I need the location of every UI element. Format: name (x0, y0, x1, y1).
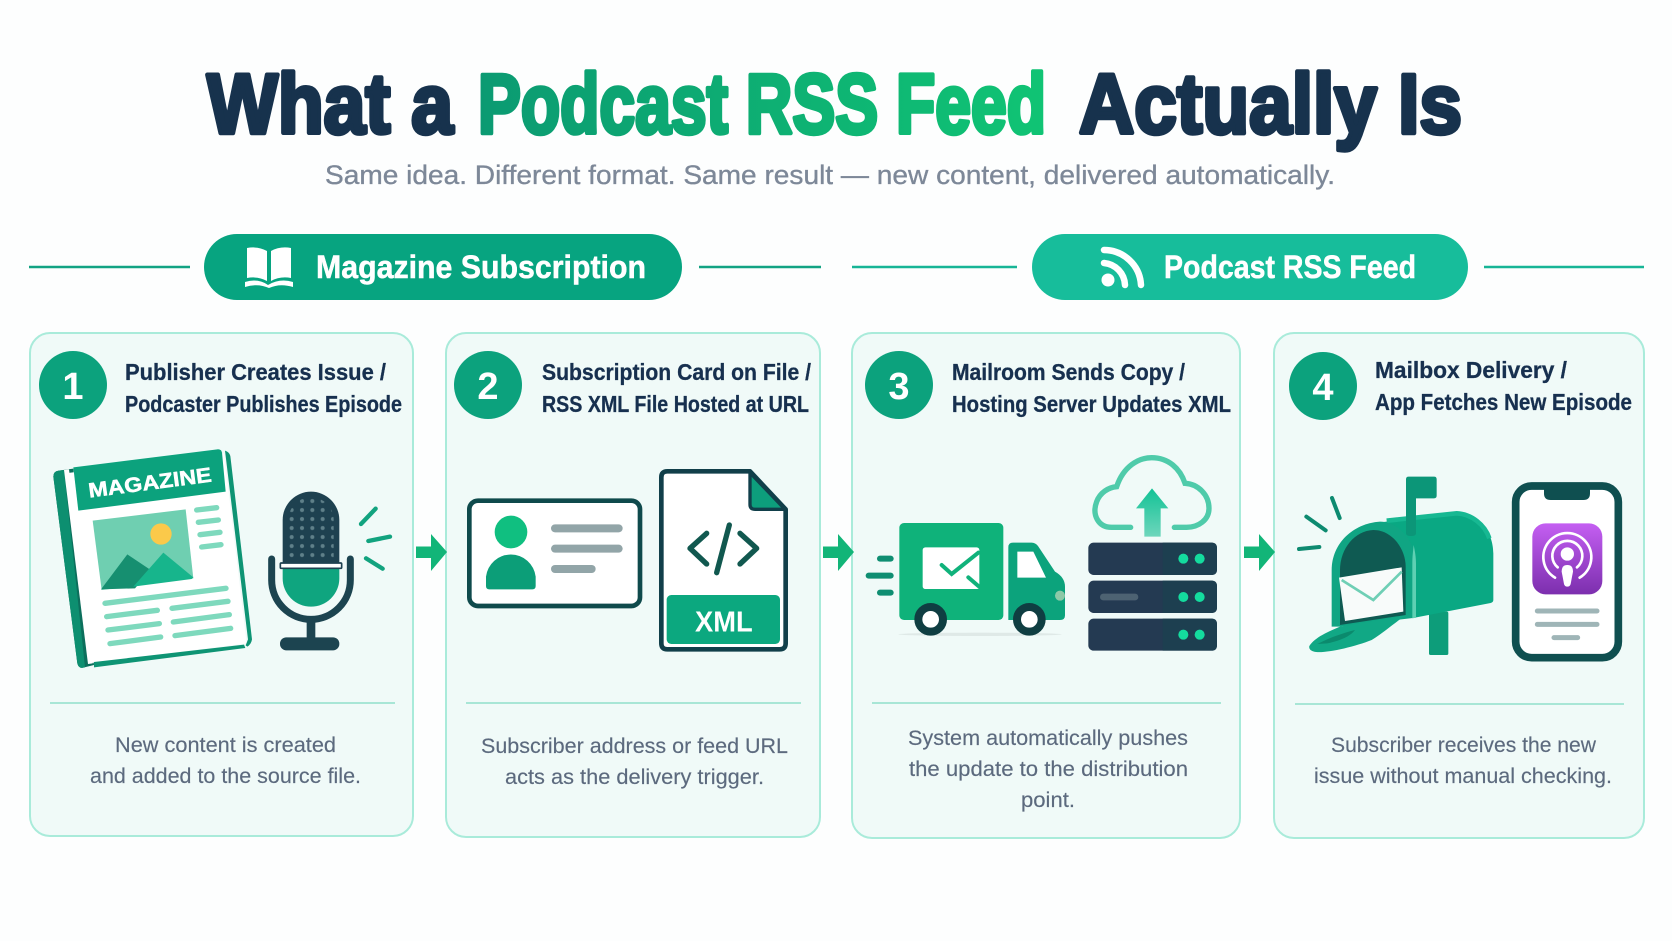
section header: Podcast RSS Feed (852, 234, 1644, 300)
icon: subscription card (469, 501, 640, 606)
icon: XML file (661, 471, 786, 649)
step 3 heading: Mailroom Sends Copy / (952, 359, 1186, 385)
title: What a (207, 57, 454, 151)
step 3 badge (865, 351, 933, 419)
step 2 badge: 2 (477, 366, 499, 408)
step 3 description: System automatically pushes (908, 726, 1188, 750)
step 1 badge (39, 351, 107, 419)
step 1 heading: Publisher Creates Issue / (125, 359, 387, 385)
panel: step 3 (852, 333, 1240, 838)
step 4 heading (1375, 357, 1632, 415)
section header: Podcast RSS Feed: Podcast RSS Feed (1164, 249, 1416, 285)
step 2 heading: Subscription Card on File / (542, 359, 812, 385)
step 3 heading (952, 359, 1231, 417)
step 1 description: and added to the source file. (90, 764, 361, 788)
icon: mailbox (1299, 477, 1493, 655)
icon: microphone (272, 492, 390, 650)
step 4 badge: 4 (1312, 367, 1334, 409)
title (207, 57, 1462, 151)
step 3 badge: 3 (888, 366, 910, 408)
step 2 badge (454, 351, 522, 419)
panel: step 2 (446, 333, 820, 837)
icon: magazine (53, 449, 252, 668)
icon: XML file: XML (695, 606, 753, 638)
step 4 heading: Mailbox Delivery / (1375, 357, 1568, 383)
icon: delivery truck (869, 523, 1065, 636)
arrow: step 2 to 3 (823, 534, 854, 571)
section header: Magazine Subscription: Magazine Subscription (316, 249, 646, 285)
arrow: step 1 to 2 (416, 534, 447, 571)
step 1 heading: Podcaster Publishes Episode (125, 391, 402, 417)
step 2 description (481, 734, 788, 789)
panel: step 1 (30, 333, 413, 836)
icon: open book (245, 247, 293, 288)
step 4 heading: App Fetches New Episode (1375, 389, 1632, 415)
icon: cloud upload and server (1088, 458, 1217, 651)
icon: RSS (1102, 250, 1141, 286)
title: Podcast RSS Feed (478, 57, 1046, 151)
step 3 heading: Hosting Server Updates XML (952, 391, 1231, 417)
section header: Magazine Subscription (29, 234, 821, 300)
step 2 description: Subscriber address or feed URL (481, 734, 788, 758)
step 4 description: Subscriber receives the new (1331, 733, 1596, 757)
step 3 description: the update to the distribution (909, 757, 1188, 781)
step 1 badge: 1 (62, 366, 84, 408)
subtitle: Same idea. Different format. Same result — new content, delivered automatically. (325, 160, 1335, 190)
arrow: step 3 to 4 (1244, 534, 1275, 571)
step 1 description (90, 733, 361, 788)
icon: phone with podcast app (1516, 486, 1618, 658)
step 1 heading (125, 359, 402, 417)
panel: step 4 (1274, 333, 1644, 838)
step 2 heading: RSS XML File Hosted at URL (542, 391, 809, 417)
step 2 heading (542, 359, 812, 417)
step 3 description: point. (1021, 788, 1075, 812)
step 4 description: issue without manual checking. (1314, 764, 1612, 788)
title: Actually Is (1079, 57, 1462, 151)
step 3 description (908, 726, 1188, 812)
step 1 description: New content is created (115, 733, 336, 757)
step 2 description: acts as the delivery trigger. (505, 765, 764, 789)
icon: magazine: MAGAZINE (87, 464, 213, 503)
step 4 badge (1289, 352, 1357, 420)
step 4 description (1314, 733, 1612, 788)
